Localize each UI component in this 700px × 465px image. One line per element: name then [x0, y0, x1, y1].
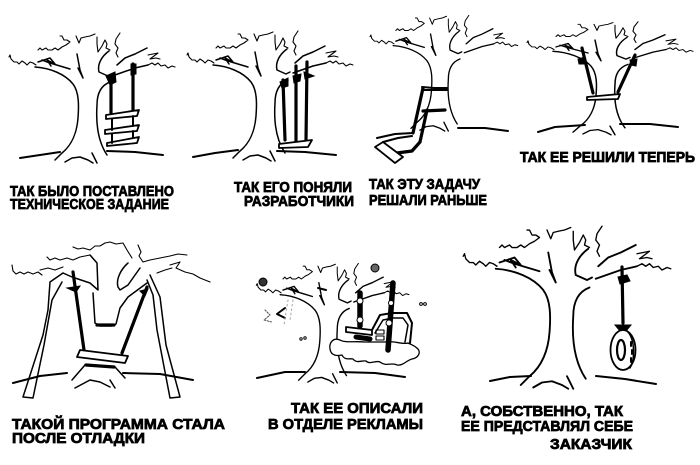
ground 3	[458, 128, 508, 131]
flower ornament	[371, 264, 379, 272]
caption 5: ПОСЛЕ ОТЛАДКИ	[12, 431, 145, 447]
caption 4: ТАК ЕЕ РЕШИЛИ ТЕПЕРЬ	[520, 150, 695, 166]
seat	[77, 350, 128, 363]
left ornament and bird	[259, 278, 293, 325]
caption 7	[461, 404, 633, 453]
tree 7	[463, 226, 671, 389]
small decorations	[300, 288, 426, 340]
caption 1	[10, 184, 174, 213]
chair	[372, 313, 412, 343]
caption 3: РЕШАЛИ РАНЬШЕ	[369, 193, 487, 209]
panel: developers swing	[187, 31, 354, 210]
caption 3: ТАК ЭТУ ЗАДАЧУ	[369, 177, 481, 193]
caption 5: ТАКОЙ ПРОГРАММА СТАЛА	[12, 415, 226, 433]
swing on trunk	[578, 48, 637, 100]
tree 4	[527, 22, 693, 135]
ropes	[73, 272, 147, 353]
three-rope swing	[279, 62, 314, 148]
caption 7: ЗАКАЗЧИК	[550, 437, 632, 453]
caption 7: ЕЕ ПРЕДСТАВЛЯЛ СЕБЕ	[461, 419, 633, 435]
caption 6: В ОТДЕЛЕ РЕКЛАМЫ	[268, 417, 423, 433]
ground 2	[193, 150, 336, 157]
panel: after debugging	[12, 242, 226, 447]
tree 6	[256, 263, 409, 383]
ground 1	[20, 151, 163, 158]
tree 5 foliage	[12, 242, 210, 282]
ground 4	[538, 124, 678, 132]
panel: previous solution	[369, 15, 518, 209]
caption 7: А, СОБСТВЕННО, ТАК	[461, 404, 623, 420]
tree 5 trunk	[63, 255, 147, 326]
panel: current solution	[520, 22, 695, 166]
caption 2: РАЗРАБОТЧИКИ	[244, 194, 354, 210]
ladder swing	[105, 64, 139, 146]
swing seat	[346, 327, 372, 335]
tree 1	[9, 33, 175, 163]
caption 6: ТАК ЕЕ ОПИСАЛИ	[291, 401, 423, 417]
caption 1: ТЕХНИЧЕСКОЕ ЗАДАНИЕ	[10, 197, 169, 213]
ground 5	[13, 373, 193, 383]
ground 6	[257, 372, 405, 378]
swing around trunk	[375, 87, 447, 163]
caption 6	[268, 401, 423, 433]
caption 2	[234, 180, 354, 210]
left post	[23, 273, 63, 398]
cloud	[330, 339, 419, 365]
tree 2	[187, 31, 353, 161]
decorated ropes	[356, 283, 394, 350]
panel: specification swing	[9, 33, 175, 213]
tree 5 trunk shadow	[97, 323, 114, 327]
caption 5	[12, 415, 226, 447]
tree 3	[370, 15, 518, 131]
caption 1: ТАК БЫЛО ПОСТАВЛЕНО	[10, 184, 174, 200]
panel: customer's vision	[461, 226, 671, 453]
panel: advertising	[256, 263, 426, 433]
caption 3	[369, 177, 487, 209]
tire swing	[610, 267, 636, 370]
stump	[72, 365, 125, 388]
knots	[67, 286, 148, 296]
right post	[147, 275, 180, 398]
ground 7	[490, 376, 656, 384]
caption 2: ТАК ЕГО ПОНЯЛИ	[234, 180, 352, 196]
